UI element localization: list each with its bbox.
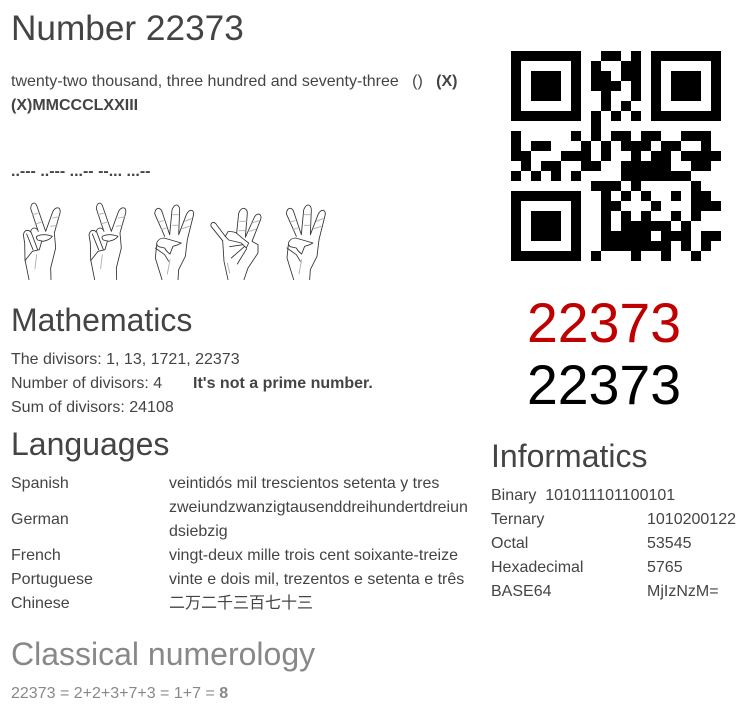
QR code [511, 51, 721, 261]
number of divisors: Number of divisors: 4 [11, 375, 162, 392]
sign language hands [22, 202, 326, 280]
french value: vingt-deux mille trois cent soixante-treize [169, 547, 458, 564]
title: Number 22373 [11, 9, 244, 48]
numerology sum: 22373 = 2+2+3+7+3 = 1+7 = 8 [11, 685, 228, 702]
hexadecimal label: Hexadecimal [491, 559, 583, 576]
base64 label: BASE64 [491, 583, 551, 600]
german value [169, 499, 468, 540]
heading: informatics: Informatics [491, 438, 647, 474]
ternary value: 1010200122 [647, 511, 736, 528]
red number image: 22373 [527, 292, 681, 354]
sum of divisors: Sum of divisors: 24108 [11, 399, 174, 416]
chinese label: Chinese [11, 595, 70, 612]
number in words and roman numerals: twenty-two thousand, three hundred and seventy-three () (X) [11, 73, 457, 90]
chinese value: 二万二千三百七十三 [169, 595, 313, 612]
divisors list: The divisors: 1, 13, 1721, 22373 [11, 351, 240, 368]
panel: languages table [11, 475, 468, 612]
hexadecimal value: 5765 [647, 559, 683, 576]
morse code: ..--- ..--- ...-- --... ...-- [11, 163, 151, 180]
ternary label: Ternary [491, 511, 544, 528]
number in words and roman numerals: (X)MMCCCLXXIII [11, 97, 138, 114]
octal value: 53545 [647, 535, 692, 552]
prime note: It's not a prime number. [193, 375, 373, 392]
black number image: 22373 [527, 354, 681, 416]
panel: informatics table [491, 487, 736, 600]
german value: dsiebzig [169, 523, 228, 540]
spanish label: Spanish [11, 475, 69, 492]
heading: classical numerology: Classical numerology [11, 636, 315, 672]
french label: French [11, 547, 61, 564]
binary: Binary 101011101100101 [491, 487, 675, 504]
spanish value: veintidós mil trescientos setenta y tres [169, 475, 439, 492]
heading: mathematics: Mathematics [11, 302, 192, 338]
german label: German [11, 511, 69, 528]
panel: mathematics facts [11, 351, 373, 416]
portuguese label: Portuguese [11, 571, 93, 588]
heading: languages: Languages [11, 426, 169, 462]
base64 value: MjIzNzM= [647, 583, 719, 600]
number in words and roman numerals [11, 73, 457, 114]
german value: zweiundzwanzigtausenddreihundertdreiun [169, 499, 468, 516]
octal label: Octal [491, 535, 528, 552]
portuguese value: vinte e dois mil, trezentos e setenta e três [169, 571, 464, 588]
